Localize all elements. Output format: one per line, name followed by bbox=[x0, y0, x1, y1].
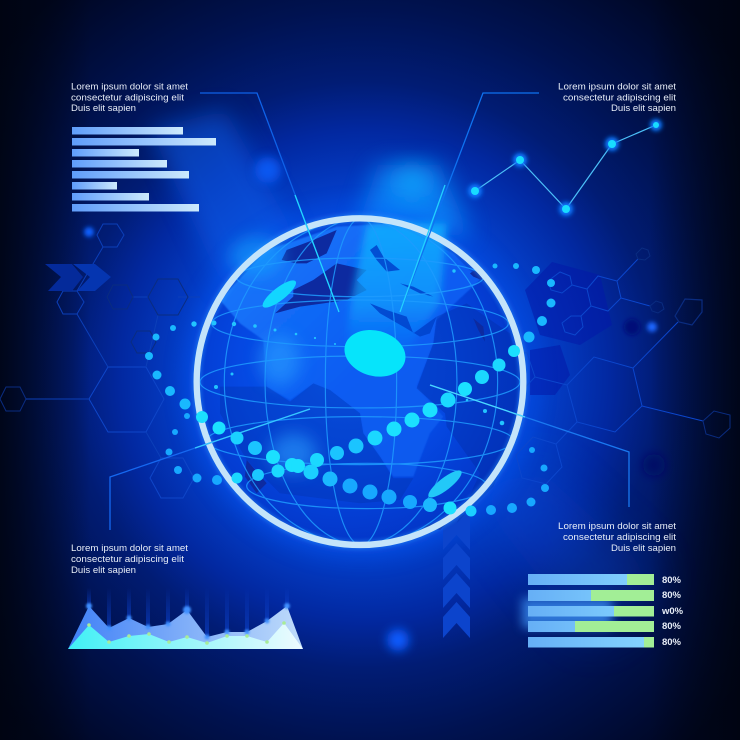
background glow spots bbox=[84, 157, 665, 651]
hexagon network: right bbox=[487, 248, 730, 484]
text block: top right bbox=[558, 82, 676, 113]
area chart: bottom left bbox=[68, 588, 303, 649]
bar value labels: 80% bbox=[662, 621, 682, 631]
small dots bbox=[191, 269, 504, 425]
text block: top left: consectetur adipiscing elit bbox=[71, 92, 184, 102]
continents: lit landmass bbox=[220, 223, 480, 477]
grid lines bbox=[200, 218, 520, 545]
leader lines bbox=[110, 93, 629, 530]
text block: top left: Lorem ipsum dolor sit amet bbox=[71, 82, 188, 92]
text block: bottom left: consectetur adipiscing elit bbox=[71, 554, 184, 564]
cyan marker ellipses bbox=[259, 276, 465, 501]
globe bbox=[197, 218, 523, 545]
bottom chevrons bbox=[443, 515, 470, 638]
text block: bottom left: Duis elit sapien bbox=[71, 565, 136, 575]
text block: bottom right: Lorem ipsum dolor sit amet bbox=[558, 521, 676, 531]
bar value labels: 80% bbox=[662, 637, 682, 647]
text block: bottom right bbox=[558, 521, 676, 553]
bar value labels: 80% bbox=[662, 590, 682, 600]
text block: top left bbox=[71, 82, 188, 113]
bright beam over globe bbox=[347, 223, 447, 357]
lower glow on globe bbox=[270, 433, 317, 473]
text block: bottom right: Duis elit sapien bbox=[611, 543, 676, 553]
text block: top right: Duis elit sapien bbox=[611, 103, 676, 113]
bar chart: top left bbox=[72, 127, 216, 212]
lower arc dots bbox=[166, 413, 549, 516]
continents: dark regions bbox=[220, 230, 520, 530]
light beams behind globe bbox=[150, 110, 660, 640]
text block: top left: Duis elit sapien bbox=[71, 103, 136, 113]
globe islands over beam bbox=[370, 245, 437, 337]
bar value labels: 80% bbox=[662, 575, 682, 585]
text block: top right: consectetur adipiscing elit bbox=[563, 92, 676, 102]
globe ring bbox=[197, 218, 523, 545]
text block: top right: Lorem ipsum dolor sit amet bbox=[558, 82, 676, 92]
top left glow on globe bbox=[230, 237, 283, 277]
text block: bottom left: Lorem ipsum dolor sit amet bbox=[71, 543, 188, 553]
line chart: top right bbox=[468, 119, 662, 216]
text block: bottom right: consectetur adipiscing elit bbox=[563, 532, 676, 542]
globe sphere bbox=[197, 218, 523, 545]
hexagon network: left bbox=[0, 224, 200, 498]
left glow on globe bbox=[260, 335, 300, 385]
upper arc dots bbox=[145, 263, 556, 473]
dotted arcs bbox=[145, 263, 556, 516]
bar value labels bbox=[661, 575, 684, 647]
left chevrons bbox=[45, 264, 111, 291]
bar value labels: w0% bbox=[661, 606, 684, 616]
progress bars: bottom right bbox=[522, 574, 684, 648]
text block: bottom left bbox=[71, 543, 188, 575]
